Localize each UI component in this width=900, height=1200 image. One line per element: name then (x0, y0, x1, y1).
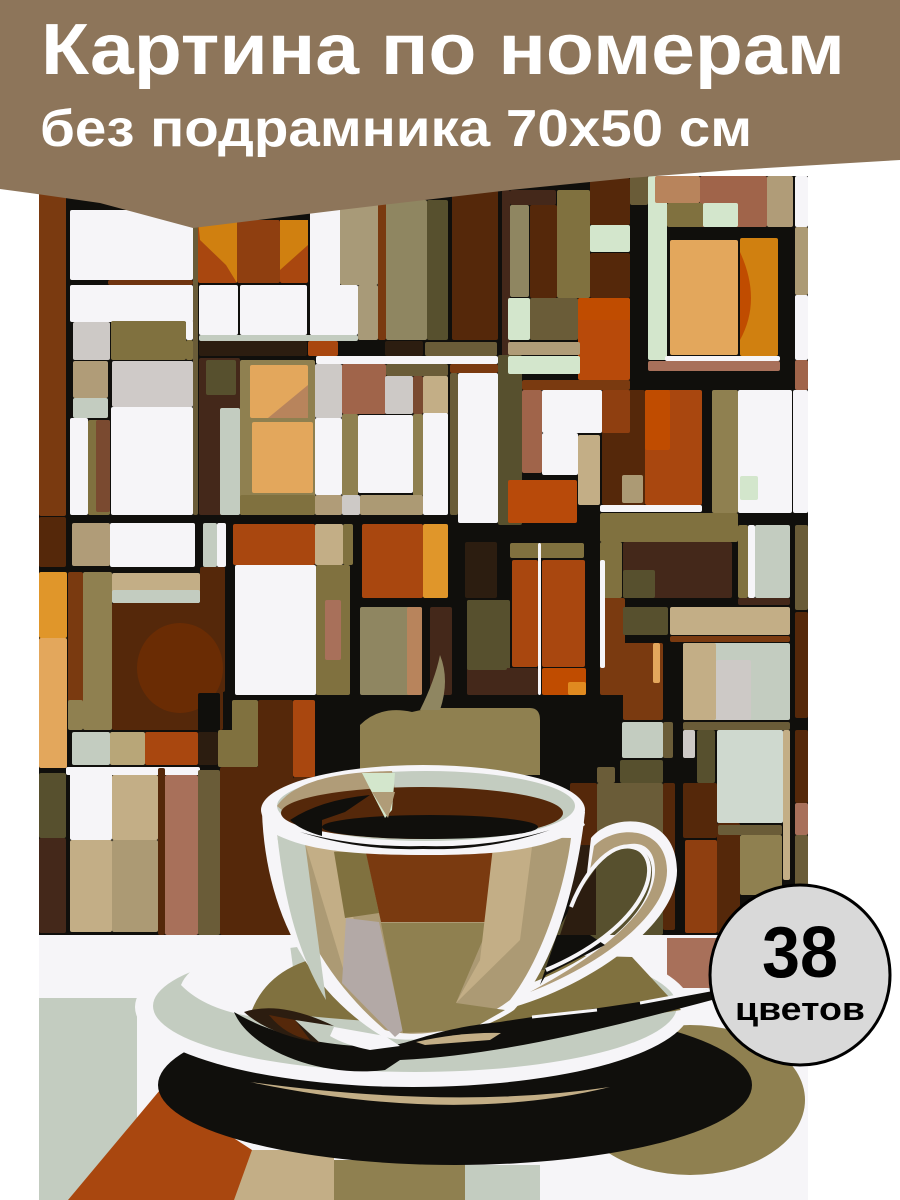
spoon (234, 988, 712, 1071)
badge: 38 colours (710, 885, 890, 1065)
badge: 38 colours: цветов (735, 991, 865, 1027)
header banner (0, 0, 900, 228)
title: Картина по номерам (41, 10, 845, 90)
badge: 38 colours: 38 (762, 913, 838, 993)
painting: abstract window blocks (39, 176, 808, 935)
subtitle: без подрамника 70х50 см (40, 100, 752, 158)
panel: painting (39, 176, 808, 1200)
illustration: coffee cup and saucer (135, 765, 712, 1087)
painting: table surface (39, 935, 808, 1200)
